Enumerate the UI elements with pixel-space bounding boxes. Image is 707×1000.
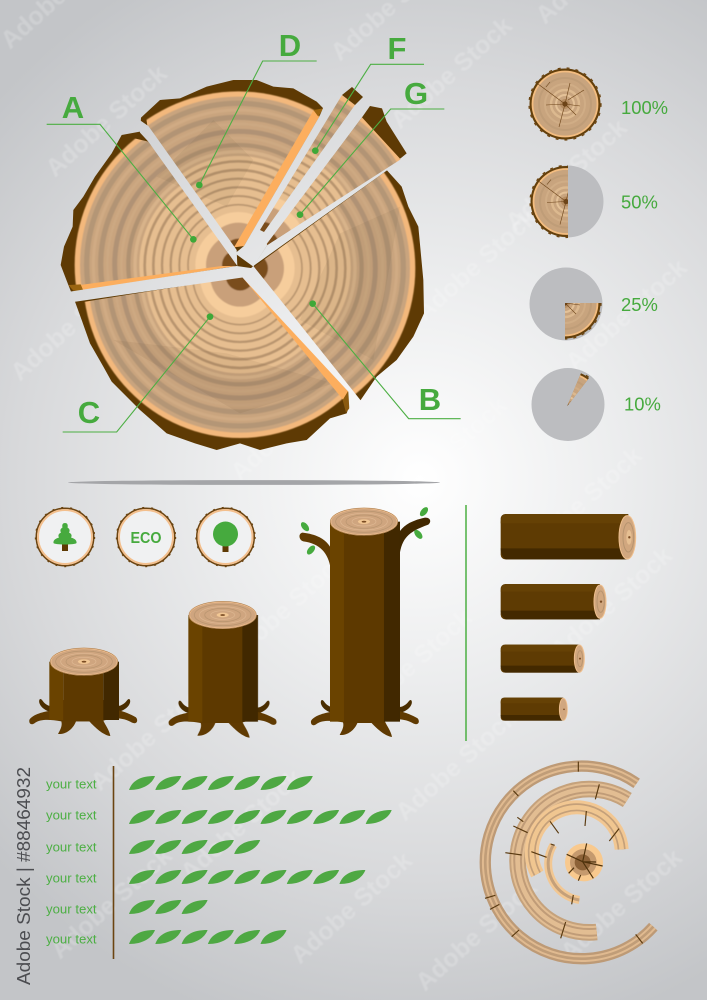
row labels: your text	[46, 840, 97, 854]
sector letters: G	[404, 76, 428, 111]
badge: round tree	[196, 508, 255, 566]
watermarks: Adobe Stock	[515, 441, 648, 564]
leaf row 2	[129, 810, 392, 824]
centre disc	[565, 843, 603, 881]
badge: ECO: ECO	[130, 530, 162, 547]
percent labels: 100%	[621, 97, 668, 118]
divider line	[465, 505, 467, 741]
watermarks: Adobe Stock	[410, 203, 543, 326]
row labels	[46, 776, 97, 946]
percent labels: 50%	[621, 192, 658, 212]
watermarks: Adobe Stock	[385, 11, 518, 134]
leaf row 1	[129, 776, 313, 790]
chart: main tree cross-section	[47, 28, 461, 450]
leaf row 5	[129, 900, 208, 914]
watermarks: Adobe Stock	[220, 546, 353, 669]
watermarks: Adobe Stock	[560, 253, 693, 376]
watermarks: Adobe Stock	[285, 846, 418, 969]
sector D wood	[146, 90, 320, 246]
sector letters: A	[62, 90, 84, 125]
row labels: your text	[46, 776, 97, 792]
watermarks: Adobe Stock	[555, 843, 688, 966]
watermarks: Adobe Stock	[85, 673, 218, 796]
sector C wood	[84, 278, 348, 439]
pie 100%	[529, 68, 601, 140]
pie 50%	[530, 166, 604, 238]
sector F, pulled out	[260, 87, 363, 232]
third arc	[532, 807, 622, 874]
row labels: your text	[46, 932, 97, 946]
cut faces of the sectors	[68, 108, 349, 413]
watermarks: Adobe Stock	[380, 391, 513, 514]
short stump	[29, 648, 137, 736]
sector G wood	[266, 118, 400, 245]
row labels: your text	[46, 870, 97, 886]
watermarks: Adobe Stock	[390, 703, 523, 826]
row labels: your text	[46, 902, 97, 916]
watermarks: Adobe Stock	[500, 113, 633, 236]
watermarks: Adobe Stock	[175, 763, 308, 886]
axis	[112, 766, 114, 959]
branch leaves	[299, 506, 430, 556]
sector letters: C	[78, 395, 100, 430]
leader dots	[190, 147, 319, 320]
leaf row 6	[129, 930, 286, 944]
log 3	[501, 645, 584, 673]
tall trunk with branches	[299, 506, 430, 737]
watermarks: Adobe Stock	[5, 263, 138, 386]
watermarks: Adobe Stock	[345, 603, 478, 726]
outer arc	[485, 766, 653, 959]
ground shadow	[68, 480, 440, 485]
percent labels: 25%	[621, 294, 658, 315]
arc cracks	[485, 762, 643, 943]
watermarks: Adobe Stock	[45, 841, 178, 964]
watermarks: Adobe Stock	[410, 873, 543, 996]
stock id vertical text: Adobe Stock | #88464932	[14, 767, 34, 985]
badge: pine tree	[36, 508, 94, 566]
watermarks: Adobe Stock	[225, 363, 358, 486]
sector letters: F	[388, 31, 406, 66]
log 4	[501, 698, 567, 721]
second arc	[518, 789, 627, 932]
sector A wood	[74, 138, 236, 290]
sector letters: D	[279, 28, 301, 63]
medium stump	[169, 601, 277, 738]
panel: log bar chart	[501, 514, 636, 721]
panel: leaf rows chart	[46, 766, 392, 959]
panel: percentage pies	[529, 68, 668, 442]
watermarks: Adobe Stock	[545, 541, 678, 664]
bark ring	[61, 80, 424, 450]
row labels: your text	[46, 808, 97, 822]
wood shadows	[113, 120, 400, 413]
panel: stump height chart	[29, 506, 430, 738]
percent labels: 10%	[624, 394, 661, 414]
branches	[299, 533, 332, 568]
leaf row 4	[129, 870, 365, 884]
log 2	[501, 584, 606, 619]
panel: eco badges	[36, 508, 255, 566]
chart: concentric ring arcs	[485, 762, 653, 959]
leader lines	[47, 61, 461, 432]
sector letters	[62, 28, 441, 430]
watermarks: Adobe Stock	[40, 59, 173, 182]
sector B wood	[254, 172, 416, 394]
leaf row 3	[129, 840, 260, 854]
pie 10%	[531, 368, 604, 442]
inner arc	[548, 845, 579, 900]
badge: ECO	[116, 508, 176, 566]
sector letters: B	[419, 382, 441, 417]
log 1	[501, 514, 636, 559]
pie 25%	[529, 267, 602, 340]
gaps between sectors	[70, 83, 409, 409]
percent labels	[621, 97, 668, 414]
